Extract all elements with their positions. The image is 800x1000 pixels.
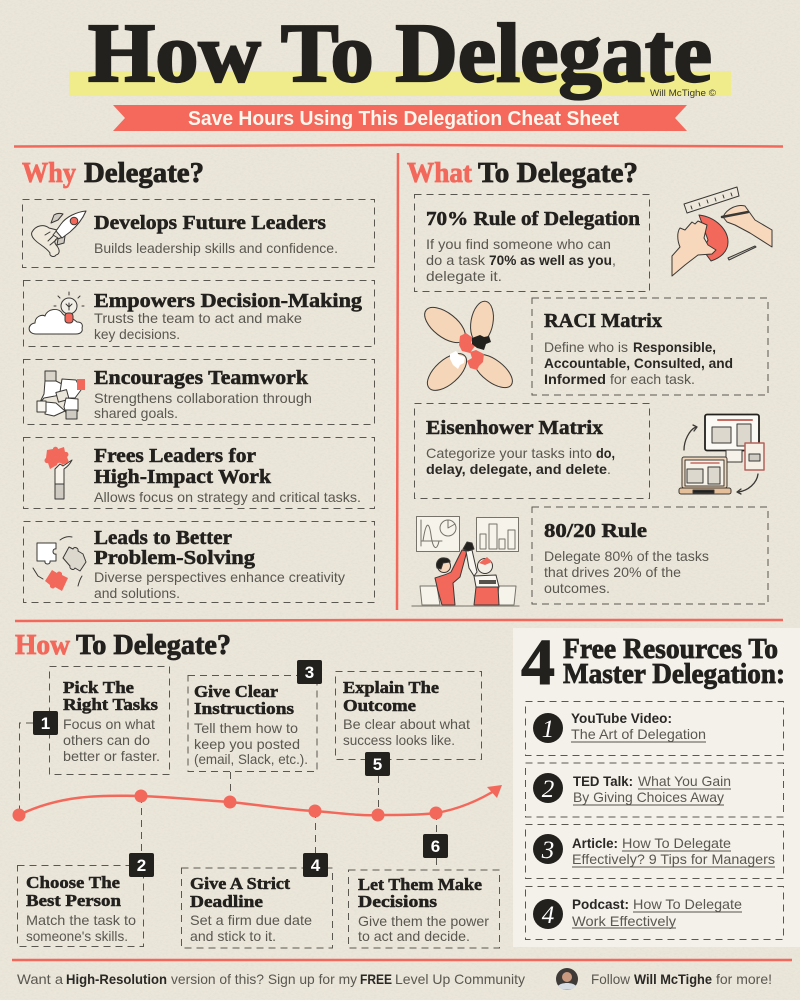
panel: what to delegate [407, 157, 772, 606]
icon: hands with ruler and protractor [672, 187, 772, 276]
heading: what to delegate: What [407, 157, 472, 189]
footer signup text: FREE [360, 971, 392, 987]
step 5 badge [365, 752, 390, 776]
step 2 text: Choose The [26, 873, 120, 892]
follow text: for more! [716, 971, 772, 987]
step 2: Best Person [26, 891, 122, 910]
step 6 badge: 6 [431, 837, 440, 856]
icon: devices with arrows [679, 414, 764, 494]
resource 3: How To Delegate [622, 835, 731, 851]
card: frees leaders: Allows focus on strategy and critical tasks. [94, 489, 361, 505]
panel: free resources [513, 626, 800, 947]
follow text: Follow [591, 971, 631, 987]
step 3 text: Give Clear [194, 682, 278, 701]
card: eisenhower matrix: Categorize your tasks into [426, 445, 592, 461]
card: eisenhower matrix: . [607, 461, 611, 477]
panel: how to delegate [12, 629, 502, 948]
subtitle ribbon: Save Hours Using This Delegation Cheat Sheet [188, 108, 619, 130]
step 6: to act and decide. [358, 928, 470, 944]
card: frees leaders: High-Impact Work [94, 466, 272, 488]
step 4: and stick to it. [190, 928, 276, 944]
card: empowers decision-making: Trusts the team to act and make [94, 310, 302, 326]
step 4: Deadline [190, 892, 264, 911]
title highlight [69, 71, 731, 96]
icon: stacked hands [37, 371, 85, 419]
card: raci matrix [532, 298, 768, 395]
step 2: someone's skills. [26, 928, 128, 944]
step 5 [336, 672, 482, 776]
card: raci matrix: Informed [544, 371, 606, 387]
resource 2: What You Gain [638, 773, 731, 789]
resource 1: The Art of Delegation [571, 726, 706, 742]
icon: cloud and bulb [29, 292, 84, 334]
step 1: Right Tasks [63, 695, 158, 714]
step 5 badge: 5 [373, 755, 382, 774]
heading: why delegate: Why [22, 157, 76, 189]
card: develops future leaders [22, 200, 374, 268]
resource 3: 3 [541, 837, 554, 864]
card: raci matrix: Define who is [544, 339, 628, 355]
resources heading: Master Delegation: [563, 659, 785, 690]
step 4 badge: 4 [311, 856, 321, 875]
resource 4: 4 [542, 902, 554, 929]
timeline curve with milestones [12, 785, 502, 822]
resources heading: 4 [521, 626, 555, 699]
step 6 [348, 834, 500, 948]
empowers text: Empowers Decision-Making [94, 290, 362, 312]
footer signup text [17, 971, 525, 987]
footer [17, 968, 772, 990]
card: 70% rule: 70% as well as you [489, 252, 612, 268]
card: 80/20 rule: that drives 20% of the [544, 564, 681, 580]
step 1 badge: 1 [41, 714, 50, 733]
footer signup text: Want a [17, 971, 63, 987]
card: raci matrix: Accountable, Consulted, and [544, 355, 733, 371]
step 6: Give them the power [358, 913, 489, 929]
step 3 badge: 3 [305, 663, 314, 682]
80/20 text: 80/20 Rule [544, 520, 647, 542]
frees text: Frees Leaders for [94, 445, 256, 467]
icon: author avatar [556, 968, 578, 990]
card: develops future leaders: Builds leadership skills and confidence. [94, 240, 338, 256]
step 3: Tell them how to [194, 720, 298, 736]
resource 4: How To Delegate [633, 896, 742, 912]
eisenhower text: Eisenhower Matrix [426, 417, 603, 439]
resource 4: Podcast: [572, 896, 629, 912]
step 5: success looks like. [343, 732, 455, 748]
resource 4 [526, 886, 784, 940]
footer signup text: High-Resolution [66, 971, 167, 987]
heading: what to delegate: To Delegate? [478, 157, 638, 189]
resource 1: YouTube Video: [571, 710, 672, 726]
follow text [591, 971, 772, 987]
card: eisenhower matrix: do, [596, 445, 615, 461]
card: encourages teamwork: shared goals. [94, 405, 178, 421]
card: 70% rule [414, 194, 650, 292]
card: 80/20 rule: Delegate 80% of the tasks [544, 548, 709, 564]
encourages text: Encourages Teamwork [94, 367, 309, 389]
card: problem-solving [24, 522, 374, 602]
icon: hands joining puzzle [419, 299, 518, 397]
step 4 text: Give A Strict [190, 874, 290, 893]
main title: How To Delegate [88, 7, 712, 100]
resource 2: TED Talk: [573, 773, 633, 789]
heading: how to delegate: How [15, 629, 70, 661]
title banner [69, 7, 731, 100]
problem-solving text: Leads to Better [94, 527, 232, 549]
card: problem-solving: Diverse perspectives enhance creativity [94, 569, 345, 585]
step 1 [33, 666, 170, 774]
card: empowers decision-making [24, 280, 374, 346]
resources heading [521, 626, 785, 699]
step 4 badge [303, 853, 328, 877]
resource 3 [526, 824, 784, 878]
step 3 [188, 660, 322, 772]
step 1: others can do [63, 732, 150, 748]
icon: rocket [32, 211, 86, 256]
resource 1 [526, 702, 784, 756]
subtitle ribbon [113, 105, 687, 131]
step 1: Focus on what [63, 716, 155, 732]
card: 80/20 rule [532, 507, 768, 604]
step 1: better or faster. [63, 748, 160, 764]
panel: why delegate [22, 157, 374, 602]
step 3: Instructions [194, 699, 294, 718]
card: eisenhower matrix [414, 404, 650, 498]
card: empowers decision-making: key decisions. [94, 326, 180, 342]
resource 3: Article: [572, 835, 618, 851]
card: frees leaders [24, 438, 374, 508]
footer signup text: version of this? Sign up for my [171, 971, 357, 987]
step 4 [182, 853, 332, 948]
resource 1: 1 [542, 716, 554, 743]
resource 4: Work Effectively [572, 913, 676, 929]
card: encourages teamwork [24, 360, 374, 424]
step 5: Outcome [343, 696, 416, 715]
develops text: Develops Future Leaders [94, 212, 326, 234]
card: 80/20 rule: outcomes. [544, 580, 610, 596]
card: 70% rule: , [612, 252, 616, 268]
card: problem-solving: and solutions. [94, 585, 180, 601]
step 2 badge: 2 [137, 856, 146, 875]
step 6: Decisions [358, 892, 437, 911]
card: eisenhower matrix: delay, delegate, and delete [426, 461, 607, 477]
icon: high five with robot [412, 516, 519, 606]
step 6 badge [423, 834, 448, 858]
card: 70% rule: delegate it. [426, 268, 502, 284]
resource 3: Effectively? 9 Tips for Managers [572, 851, 775, 867]
author credit: Will McTighe © [650, 88, 716, 98]
icon: hand with puzzle piece [45, 447, 72, 499]
resource 2 [526, 763, 784, 817]
card: problem-solving: Problem-Solving [94, 547, 255, 569]
step 5 text: Explain The [343, 678, 439, 697]
step 4: Set a firm due date [190, 912, 312, 928]
step 2 [18, 853, 154, 946]
card: raci matrix: for each task. [610, 371, 695, 387]
step 3: (email, Slack, etc.). [194, 751, 308, 767]
card: 70% rule: If you find someone who can [426, 236, 611, 252]
footer signup text: Level Up Community [395, 971, 525, 987]
resources heading: Free Resources To [563, 634, 778, 665]
step 3: keep you posted [194, 736, 300, 752]
card: raci matrix: Responsible, [633, 339, 716, 355]
resource 2: By Giving Choices Away [573, 789, 724, 805]
card: encourages teamwork: Strengthens collaboration through [94, 390, 312, 406]
heading: why delegate: Delegate? [84, 157, 204, 189]
follow text: Will McTighe [634, 971, 712, 987]
step 6 text: Let Them Make [358, 875, 482, 894]
step 5: Be clear about what [343, 716, 470, 732]
heading: how to delegate: To Delegate? [76, 629, 231, 661]
step 2: Match the task to [26, 912, 136, 928]
step 1 text: Pick The [63, 678, 134, 697]
resource 2: 2 [542, 776, 554, 803]
card: 70% rule: do a task [426, 252, 486, 268]
raci text: RACI Matrix [544, 310, 662, 332]
icon: scattered puzzle pieces [33, 537, 86, 591]
70% rule text: 70% Rule of Delegation [426, 208, 640, 230]
